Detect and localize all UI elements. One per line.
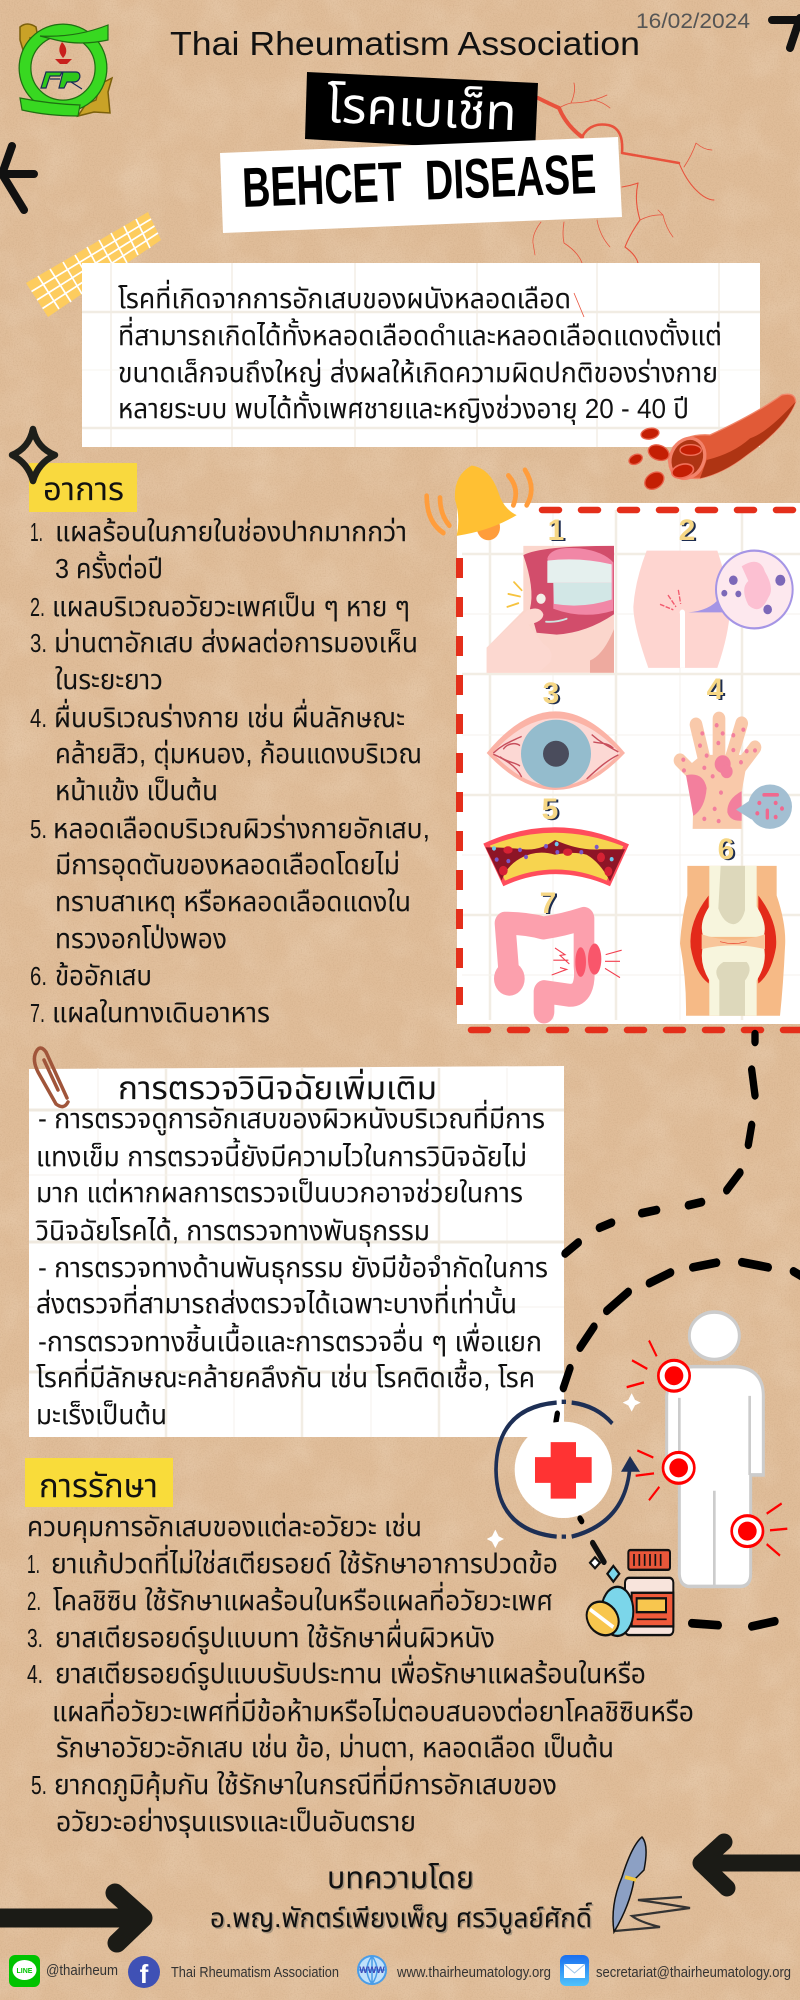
- icon: pen with scribble: [613, 1837, 690, 1932]
- title: English: [220, 137, 622, 233]
- title: Thai: โรคเบเช็ท: [326, 77, 518, 141]
- symptom list: ทราบสาเหตุ หรือหลอดเลือดแดงใน: [55, 886, 411, 918]
- number 1: 1: [550, 515, 566, 548]
- symptom list: ข้ออักเสบ: [55, 960, 152, 991]
- footer: website: WWW: [359, 1965, 385, 1975]
- symptom list: 3.: [30, 628, 47, 658]
- panel: additional investigations: มาก แต่หากผลการตรวจเป็นบวกอาจช่วยในการ: [36, 1177, 523, 1208]
- symptom list: ทรวงอกโป่งพอง: [55, 923, 227, 954]
- symptom list: 7.: [30, 998, 45, 1028]
- number 1: 1: [548, 514, 564, 547]
- symptom list: มีการอุดตันของหลอดเลือดโดยไม่: [55, 849, 400, 881]
- number 6: 6: [720, 834, 736, 867]
- symptom list: [30, 516, 430, 1028]
- dashed path lines: [556, 1034, 800, 1626]
- symptom list: 1.: [30, 517, 43, 547]
- author credit: [210, 1862, 594, 1936]
- title: English: BEHCET: [241, 150, 403, 219]
- number 3: 3: [545, 678, 561, 711]
- number 2: 2: [679, 514, 695, 547]
- footer: LINE: [9, 1955, 118, 1987]
- title: Thai: [305, 72, 538, 152]
- illustration 1: mouth ulcer: [487, 546, 614, 673]
- treatment list: แผลที่อวัยวะเพศที่มีข้อห้ามหรือไม่ตอบสนองต่อยาโคลชิซินหรือ: [52, 1692, 694, 1727]
- icon: bell: [427, 466, 531, 540]
- symptom list: หน้าแข้ง เป็นต้น: [55, 775, 218, 806]
- treatment list: ยาสเตียรอยด์รูปแบบทา ใช้รักษาผื่นผิวหนัง: [55, 1618, 495, 1655]
- panel: definition: ขนาดเล็กจนถึงใหญ่ ส่งผลให้เกิดความผิดปกติของร่างกาย: [118, 357, 718, 388]
- treatment list: 3.: [27, 1623, 43, 1653]
- icon: medical cross in circle: [496, 1402, 640, 1537]
- panel: additional investigations: - การตรวจทางด้านพันธุกรรม ยังมีข้อจำกัดในการ: [38, 1252, 548, 1284]
- panel: additional investigations: มะเร็งเป็นต้น: [36, 1399, 167, 1430]
- panel: additional investigations: ส่งตรวจที่สามารถส่งตรวจได้เฉพาะบางที่เท่านั้น: [36, 1284, 517, 1319]
- heading: treatment: [25, 1458, 173, 1507]
- symptom list: 5.: [30, 814, 47, 844]
- panel: definition: ที่สามารถเกิดได้ทั้งหลอดเลือดดำและหลอดเลือดแดงตั้งแต่: [118, 316, 722, 351]
- treatment list: อวัยวะอย่างรุนแรงและเป็นอันตราย: [56, 1806, 416, 1838]
- icon: paper clip: [34, 1048, 68, 1107]
- symptom list: 2.: [30, 592, 45, 622]
- icon: medicine bottle and pills: [582, 1543, 673, 1642]
- title: English: DISEASE: [424, 142, 597, 212]
- number 7: 7: [540, 887, 556, 920]
- treatment list: [27, 1511, 694, 1838]
- icon: star outline: [12, 429, 55, 481]
- panel: additional investigations: วินิจฉัยโรคได้, การตรวจทางพันธุกรรม: [35, 1215, 430, 1247]
- illustration 5: blocked artery: [483, 827, 629, 886]
- illustration 2: genital ulcer: [633, 551, 793, 668]
- number 5: 5: [544, 794, 560, 827]
- footer: website: [358, 1956, 551, 1984]
- number 7: 7: [542, 888, 558, 921]
- illustration 3: inflamed eye: [487, 711, 625, 790]
- author credit: อ.พญ.พักตร์เพียงเพ็ญ ศรวิบูลย์ศักดิ์: [212, 1904, 594, 1936]
- arrow: left pointing, bottom right: [701, 1842, 800, 1888]
- footer: Facebook: f: [140, 1959, 149, 1989]
- icon: sparkles: [487, 1393, 641, 1548]
- footer: LINE: LINE: [17, 1968, 33, 1975]
- date: 16/02/2024: [636, 10, 750, 33]
- treatment list: โคลชิซิน ใช้รักษาแผลร้อนในหรือแผลที่อวัยวะเพศ: [53, 1581, 553, 1616]
- panel: definition: หลายระบบ พบได้ทั้งเพศชายและหญิงช่วงอายุ 20 - 40 ปี: [118, 391, 689, 425]
- arrow: left: [0, 146, 34, 210]
- treatment list: 4.: [27, 1659, 43, 1689]
- heading: symptoms: [29, 463, 137, 512]
- panel: additional investigations: -การตรวจทางชิ้นเนื้อและการตรวจอื่น ๆ เพื่อแยก: [38, 1322, 542, 1357]
- author credit: อ.พญ.พักตร์เพียงเพ็ญ ศรวิบูลย์ศักดิ์: [210, 1903, 592, 1934]
- symptom list: หลอดเลือดบริเวณผิวร่างกายอักเสบ,: [53, 813, 430, 844]
- author credit: บทความโดย: [327, 1862, 474, 1895]
- illustration 7: inflamed colon: [494, 918, 622, 1012]
- symptom list: แผลร้อนในภายในช่องปากมากกว่า: [55, 516, 407, 547]
- symptom list: ในระยะยาว: [55, 664, 163, 695]
- number 4: 4: [709, 674, 726, 707]
- illustration: artery with blood cells: [627, 394, 796, 493]
- treatment list: ควบคุมการอักเสบของแต่ละอวัยวะ เช่น: [27, 1511, 422, 1543]
- arrow: top right: [772, 18, 800, 48]
- arrow: right pointing, bottom left: [0, 1893, 143, 1943]
- symptom list: ผื่นบริเวณร่างกาย เช่น ผื่นลักษณะ: [54, 698, 405, 733]
- panel: additional investigations: [29, 1066, 564, 1437]
- footer: LINE: @thairheum: [46, 1962, 118, 1979]
- symptom list: คล้ายสิว, ตุ่มหนอง, ก้อนแดงบริเวณ: [55, 738, 422, 770]
- number 5: 5: [542, 793, 558, 826]
- treatment list: รักษาอวัยวะอักเสบ เช่น ข้อ, ม่านตา, หลอดเลือด เป็นต้น: [56, 1732, 614, 1763]
- number 3: 3: [543, 677, 559, 710]
- author credit: บทความโดย: [328, 1864, 476, 1896]
- panel: definition: โรคที่เกิดจากการอักเสบของผนังหลอดเลือด: [118, 279, 571, 314]
- treatment list: 5.: [31, 1770, 47, 1800]
- treatment list: 2.: [27, 1586, 41, 1616]
- heading: symptoms: อาการ: [43, 471, 124, 507]
- treatment list: ยาสเตียรอยด์รูปแบบรับประทาน เพื่อรักษาแผลร้อนในหรือ: [55, 1654, 646, 1691]
- illustration 4: skin rash on hand: [680, 719, 792, 829]
- symptom list: แผลในทางเดินอาหาร: [52, 997, 270, 1028]
- footer: Facebook: Thai Rheumatism Association: [171, 1964, 339, 1981]
- number 2: 2: [681, 515, 697, 548]
- illustration: blood vessels: [533, 83, 714, 293]
- footer: email: [560, 1955, 791, 1986]
- footer: website: www.thairheumatology.org: [396, 1964, 551, 1981]
- treatment list: ยาแก้ปวดที่ไม่ใช่สเตียรอยด์ ใช้รักษาอาการปวดข้อ: [51, 1544, 558, 1579]
- association logo: [20, 24, 112, 116]
- panel: symptom illustrations: [457, 503, 800, 1030]
- number 6: 6: [718, 833, 734, 866]
- heading: association name: Thai Rheumatism Association: [170, 25, 640, 62]
- panel: additional investigations: - การตรวจดูการอักเสบของผิวหนังบริเวณที่มีการ: [38, 1099, 545, 1136]
- panel: additional investigations: แทงเข็ม การตรวจนี้ยังมีความไวในการวินิจฉัยไม่: [36, 1137, 527, 1172]
- symptom list: แผลบริเวณอวัยวะเพศเป็น ๆ หาย ๆ: [52, 591, 410, 622]
- panel: additional investigations: โรคที่มีลักษณะคล้ายคลึงกัน เช่น โรคติดเชื้อ, โรค: [36, 1358, 535, 1393]
- symptom list: 4.: [30, 703, 47, 733]
- illustration: body with pain points: [627, 1312, 787, 1586]
- panel: additional investigations: การตรวจวินิจฉัยเพิ่มเติม: [118, 1068, 437, 1106]
- heading: treatment: การรักษา: [39, 1467, 158, 1504]
- footer: Facebook: [128, 1956, 339, 1989]
- treatment list: ยากดภูมิคุ้มกัน ใช้รักษาในกรณีที่มีการอักเสบของ: [54, 1765, 557, 1802]
- panel: definition: [82, 263, 760, 447]
- symptom list: 3 ครั้งต่อปี: [55, 551, 163, 584]
- symptom list: 6.: [30, 961, 47, 991]
- illustration 6: inflamed knee joint: [680, 866, 785, 1016]
- treatment list: 1.: [27, 1549, 40, 1579]
- number 4: 4: [707, 673, 724, 706]
- decorative yellow tape: [26, 212, 161, 317]
- symptom list: ม่านตาอักเสบ ส่งผลต่อการมองเห็น: [54, 627, 418, 658]
